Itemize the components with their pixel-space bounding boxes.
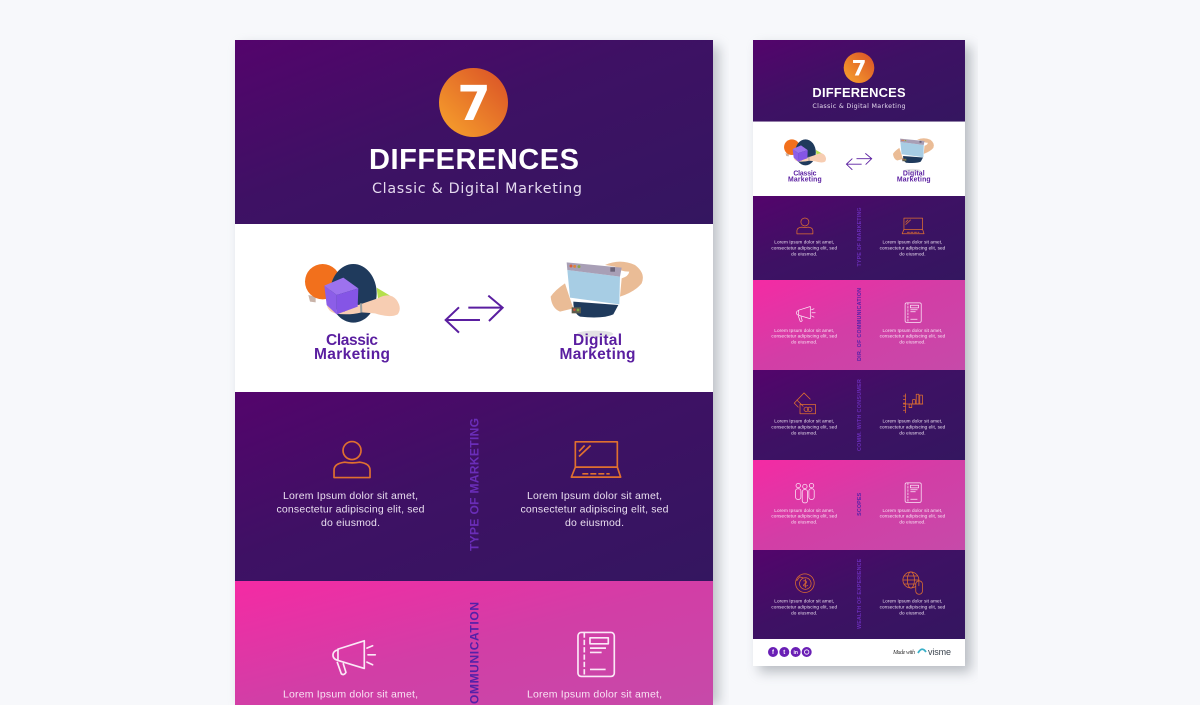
made with visme: visme: [928, 647, 951, 657]
panel: header: [235, 40, 713, 224]
row: scopes: [753, 460, 965, 550]
text left: [771, 508, 837, 525]
text right: consectetur adipiscing elit, sed: [880, 334, 946, 339]
text right: do eiusmod.: [899, 430, 926, 435]
icon: megaphone: [333, 641, 375, 675]
label: digital marketing: Digital: [573, 332, 622, 349]
text right: Lorem Ipsum dolor sit amet,: [883, 598, 942, 603]
social icons: t: [783, 650, 785, 656]
icon: notebook: [905, 483, 921, 502]
subtitle: Classic & Digital Marketing: [372, 181, 582, 197]
panel: small comparison: [753, 122, 965, 196]
label: SCOPES: [857, 492, 863, 516]
text: classic communication: Lorem Ipsum dolor sit amet,: [283, 689, 418, 701]
text left: Lorem Ipsum dolor sit amet,: [774, 239, 834, 244]
text left: consectetur adipiscing elit, sed: [771, 604, 837, 609]
text left: do eiusmod.: [791, 430, 817, 435]
panel: comparison: [235, 224, 713, 392]
small title: DIFFERENCES: [812, 85, 906, 100]
label: WEALTH OF EXPERIENCE: [857, 558, 863, 629]
small label: digital: Marketing: [897, 176, 931, 183]
label: digital marketing: Marketing: [560, 346, 636, 363]
text right: [880, 239, 946, 256]
text left: do eiusmod.: [791, 251, 817, 256]
icon: laptop: [571, 442, 621, 477]
text right: [880, 418, 946, 435]
text right: [880, 508, 946, 525]
heading: type of marketing: TYPE OF MARKETING: [468, 418, 482, 551]
icon: cards and bill: [794, 393, 816, 414]
illustration: digital marketing: [551, 262, 643, 337]
small label: classic: Marketing: [788, 176, 822, 183]
label: TYPE OF MARKETING: [857, 208, 863, 267]
made with visme: [892, 647, 951, 657]
panel: type of marketing: [235, 392, 713, 581]
panel: small full-length preview: [753, 40, 971, 672]
arrows: exchange: [446, 296, 503, 333]
text right: consectetur adipiscing elit, sed: [880, 514, 946, 519]
text left: Lorem Ipsum dolor sit amet,: [774, 598, 834, 603]
text right: do eiusmod.: [899, 251, 926, 256]
label: classic marketing: [314, 332, 390, 363]
text left: Lorem Ipsum dolor sit amet,: [774, 418, 834, 423]
text left: do eiusmod.: [791, 610, 817, 615]
text: digital type: consectetur adipiscing elit, sed: [520, 504, 669, 516]
text left: Lorem Ipsum dolor sit amet,: [774, 508, 834, 513]
badge: small number 7: 7: [852, 56, 866, 81]
text: classic type: do eiusmod.: [321, 517, 380, 529]
panel: large infographic preview: [235, 40, 719, 705]
icon: notebook: [905, 303, 921, 322]
icon: laptop: [902, 218, 924, 234]
small label: digital: [897, 170, 931, 183]
text left: consectetur adipiscing elit, sed: [771, 245, 837, 250]
text: digital type: [520, 490, 669, 529]
text: classic type: consectetur adipiscing elit, sed: [276, 504, 425, 516]
social icons: in: [793, 650, 798, 656]
text right: do eiusmod.: [899, 340, 926, 345]
text right: consectetur adipiscing elit, sed: [880, 604, 946, 609]
text: classic type: Lorem Ipsum dolor sit amet,: [283, 490, 418, 502]
small subtitle: Classic & Digital Marketing: [812, 103, 906, 110]
text left: [771, 328, 837, 345]
text left: Lorem Ipsum dolor sit amet,: [774, 328, 834, 333]
text left: consectetur adipiscing elit, sed: [771, 514, 837, 519]
icon: megaphone: [796, 307, 815, 321]
text right: Lorem Ipsum dolor sit amet,: [883, 508, 942, 513]
label: classic marketing: Classic: [326, 332, 378, 349]
row: direction of communication: [753, 280, 965, 370]
text: digital type: do eiusmod.: [565, 517, 624, 529]
text left: [771, 418, 837, 435]
row: wealth of experience: [753, 550, 965, 639]
icon: bar chart: [903, 394, 923, 413]
label: digital marketing: [560, 332, 636, 363]
small label: classic: [788, 170, 822, 183]
label: classic marketing: Marketing: [314, 346, 390, 363]
icon: person: [334, 442, 370, 478]
small illustration: digital: [893, 138, 934, 172]
illustration: classic marketing: [305, 264, 400, 323]
footer: [753, 639, 965, 666]
badge: number 7: 7: [457, 76, 491, 132]
text left: do eiusmod.: [791, 520, 817, 525]
icon: globe and mouse: [903, 572, 922, 594]
text right: do eiusmod.: [899, 610, 926, 615]
text right: Lorem Ipsum dolor sit amet,: [883, 418, 942, 423]
row: communication with consumer: [753, 370, 965, 460]
small label: digital: Digital: [903, 170, 925, 177]
text right: [880, 328, 946, 345]
small illustration: classic: [784, 139, 826, 165]
text: digital type: Lorem Ipsum dolor sit amet,: [527, 490, 662, 502]
text: classic type: [276, 490, 425, 529]
icon: coin: [796, 574, 814, 592]
badge: small number 7: [844, 52, 874, 83]
small label: classic: Classic: [793, 170, 817, 177]
label: DIR. OF COMMUNICATION: [857, 288, 863, 361]
panel: direction of communication: [235, 581, 713, 705]
icon: person: [797, 218, 813, 234]
text left: consectetur adipiscing elit, sed: [771, 424, 837, 429]
text right: Lorem Ipsum dolor sit amet,: [883, 239, 942, 244]
text right: Lorem Ipsum dolor sit amet,: [883, 328, 942, 333]
text right: do eiusmod.: [899, 520, 926, 525]
title: DIFFERENCES: [369, 144, 579, 176]
social icons: [768, 647, 812, 657]
text left: consectetur adipiscing elit, sed: [771, 334, 837, 339]
text: digital communication: Lorem Ipsum dolor sit amet,: [527, 689, 662, 701]
small arrows: [846, 153, 872, 170]
text left: [771, 239, 837, 256]
text left: [771, 598, 837, 615]
icon: people: [796, 483, 814, 503]
made with visme: Made with: [892, 650, 915, 656]
icon: notebook: [578, 632, 614, 676]
row: type of marketing: [753, 196, 965, 280]
text right: [880, 598, 946, 615]
panel: small header: [753, 40, 965, 122]
text right: consectetur adipiscing elit, sed: [880, 245, 946, 250]
text right: consectetur adipiscing elit, sed: [880, 424, 946, 429]
text left: do eiusmod.: [791, 340, 817, 345]
heading: direction of communication, cropped by the frame: OMMUNICATION: [468, 602, 482, 704]
social icons: f: [772, 650, 775, 656]
label: COMM. WITH CONSUMER: [857, 379, 863, 451]
badge: number 7: [439, 68, 508, 137]
